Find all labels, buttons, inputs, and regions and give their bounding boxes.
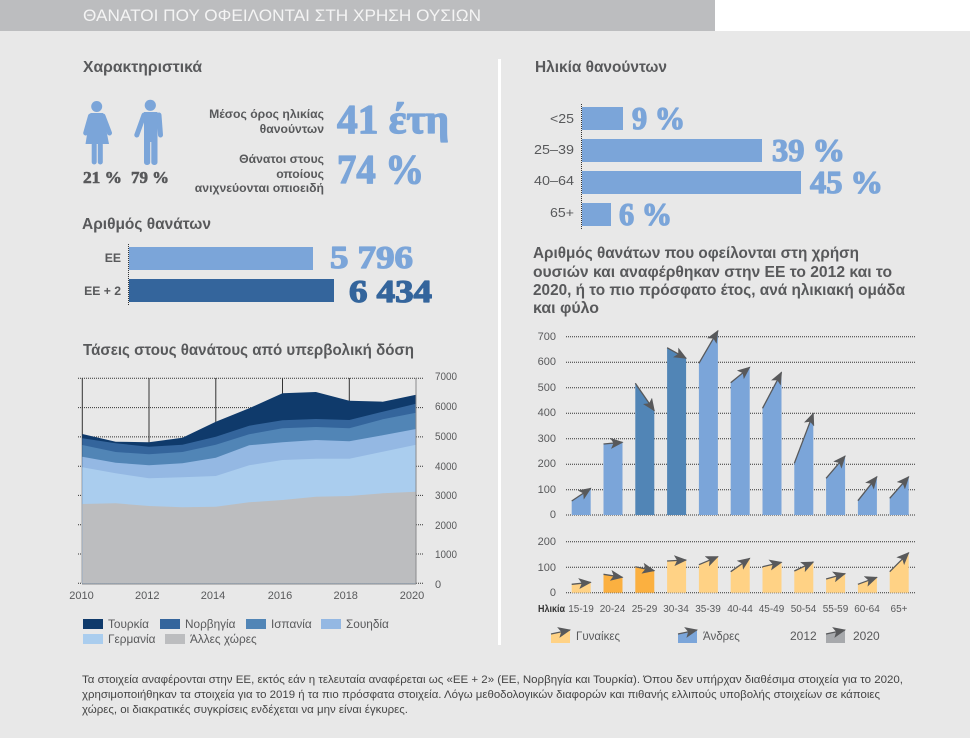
bar: under 25: 9 %: [632, 100, 685, 136]
bar: EU: 5 796: [330, 239, 413, 275]
chart: women: 0: [550, 587, 556, 599]
age group labels: 15-19: [568, 604, 594, 615]
chart: women: [538, 536, 915, 599]
heading: deaths by age and sex: 2020, ή το πιο πρόσφατο έτος, ανά ηλικιακή ομάδα: [533, 282, 905, 299]
age group labels: 35-39: [695, 604, 721, 615]
bar: 40-64: 40–64: [534, 174, 574, 188]
y axis labels: 0: [435, 579, 441, 591]
title banner: [0, 0, 715, 31]
y axis labels: 1000: [435, 549, 457, 561]
footnote: Τα στοιχεία αναφέρονται στην ΕΕ, εκτός εάν η τελευταία αναφέρεται ως «ΕΕ + 2» (ΕΕ, Νορβηγία και Τουρκία). Όπου δεν υπήρχαν διαθέσιμα στοιχεία για το 2020,: [82, 674, 903, 686]
age group labels: 55-59: [823, 604, 849, 615]
bar: under 25: <25: [550, 112, 574, 126]
panel: overdose trends: [69, 342, 457, 646]
chart: men: 400: [538, 407, 556, 419]
age group labels: [538, 604, 908, 615]
legend: area chart: Σουηδία: [346, 617, 389, 631]
bar: 25-39: [534, 132, 845, 168]
x axis labels: 2020: [400, 590, 424, 602]
chart: men: 600: [538, 356, 556, 368]
age group labels: Ηλικία: [538, 604, 566, 615]
panel: age of deceased: [534, 59, 883, 232]
legend: men: [678, 630, 740, 643]
y axis labels: 4000: [435, 461, 457, 473]
y axis labels: 5000: [435, 431, 457, 443]
legend: years: 2012: [790, 629, 817, 643]
legend: area chart: [83, 617, 389, 646]
panel: deaths by age and sex: [533, 245, 915, 643]
heading: deaths by age and sex: ουσιών και αναφέρθηκαν στην ΕΕ το 2012 και το: [533, 264, 892, 281]
icon: woman: [86, 101, 110, 164]
chart: men: 200: [538, 458, 556, 470]
share women: 21 %: [83, 168, 122, 187]
y axis labels: 2000: [435, 520, 457, 532]
heading: overdose trends: Τάσεις στους θανάτους από υπερβολική δόση: [83, 342, 414, 359]
legend: area chart: Ισπανία: [271, 617, 312, 631]
series: Germany: [82, 445, 416, 583]
label: opioids: οποίους: [276, 167, 324, 181]
panel: characteristics: [83, 59, 449, 195]
area chart: [69, 371, 457, 602]
heading: age of deceased: Ηλικία θανούντων: [535, 59, 667, 76]
legend: women: Γυναίκες: [576, 631, 620, 643]
panel: number of deaths: [82, 216, 432, 309]
label: mean age: Μέσος όρος ηλικίας: [209, 107, 324, 121]
x axis labels: 2016: [268, 590, 292, 602]
series: Norway: [82, 404, 416, 583]
legend: years: 2020: [853, 629, 880, 643]
heading: deaths by age and sex: Αριθμός θανάτων που οφείλονται στη χρήση: [533, 245, 859, 262]
value: mean age: 41 έτη: [337, 96, 449, 142]
bar: 25-39: 39 %: [772, 132, 845, 168]
legend: years: [790, 629, 880, 643]
age group labels: 45-49: [759, 604, 785, 615]
chart: men: [538, 331, 915, 521]
bar: 65+: 65+: [550, 206, 574, 220]
chart: men: 100: [538, 484, 556, 496]
bar: 65+: [550, 196, 672, 232]
age group labels: 25-29: [632, 604, 658, 615]
y axis labels: 7000: [435, 371, 457, 383]
footnote: χρησιμοποιήθηκαν τα στοιχεία για το 2019 ή τα πιο πρόσφατα στοιχεία. Λόγω μεθοδολογικών διαφορών και πιθανής ελλιπούς υποβολής στοιχείων σε κάποιες: [82, 689, 880, 701]
series: Turkey: [82, 392, 416, 583]
value: opioids: 74 %: [337, 146, 424, 192]
legend: men: Άνδρες: [703, 631, 740, 643]
bar: 40-64: [534, 164, 883, 200]
footnote: χώρες, οι διακρατικές συγκρίσεις ενδέχεται να μην είναι έγκυρες.: [82, 704, 408, 716]
bar: EU + 2: [84, 273, 432, 309]
label: mean age: θανούντων: [260, 122, 324, 136]
heading: characteristics: Χαρακτηριστικά: [83, 59, 202, 76]
bar: EU: [105, 239, 413, 275]
chart: men: 0: [550, 509, 556, 521]
x axis labels: [69, 590, 424, 602]
title banner: ΘΑΝΑΤΟΙ ΠΟΥ ΟΦΕΙΛΟΝΤΑΙ ΣΤΗ ΧΡΗΣΗ ΟΥΣΙΩΝ: [83, 7, 481, 25]
y axis labels: 6000: [435, 401, 457, 413]
icon: man: [137, 100, 160, 165]
bar: 65+: 6 %: [619, 196, 672, 232]
bar: EU + 2: 6 434: [349, 273, 432, 309]
chart: women: 200: [538, 536, 556, 548]
legend: bars: [551, 629, 880, 643]
series: Sweden: [82, 429, 416, 583]
x axis labels: 2012: [135, 590, 160, 602]
chart: men: 500: [538, 382, 556, 394]
legend: women: [551, 630, 620, 643]
x axis labels: 2018: [333, 590, 358, 602]
bar: under 25: [550, 100, 685, 136]
age group labels: 65+: [891, 604, 908, 615]
x axis labels: 2010: [69, 590, 94, 602]
legend: area chart: Άλλες χώρες: [190, 632, 257, 646]
age group labels: 40-44: [727, 604, 753, 615]
y axis labels: [435, 371, 457, 591]
bar: EU: ΕΕ: [105, 251, 121, 265]
series: other countries: [82, 492, 416, 583]
age group labels: 60-64: [854, 604, 880, 615]
series: Spain: [82, 413, 416, 583]
heading: deaths by age and sex: [533, 245, 905, 317]
legend: area chart: Νορβηγία: [185, 617, 236, 631]
legend: area chart: Γερμανία: [108, 632, 156, 646]
footnote: [82, 674, 903, 716]
label: opioids: ανιχνεύονται οπιοειδή: [195, 181, 324, 195]
bar: 25-39: 25–39: [534, 143, 574, 157]
y axis labels: 3000: [435, 490, 457, 502]
label: opioids: [195, 152, 324, 195]
age group labels: 30-34: [663, 604, 689, 615]
share men: 79 %: [131, 168, 169, 187]
chart: women: 100: [538, 562, 556, 574]
chart: men: 700: [538, 331, 556, 343]
legend: area chart: Τουρκία: [108, 617, 149, 631]
heading: number of deaths: Αριθμός θανάτων: [82, 216, 211, 233]
bar: 40-64: 45 %: [810, 164, 883, 200]
heading: deaths by age and sex: και φύλο: [533, 300, 599, 317]
x axis labels: 2014: [201, 590, 225, 602]
label: mean age: [209, 107, 324, 136]
chart: men: 300: [538, 433, 556, 445]
label: opioids: Θάνατοι στους: [239, 152, 324, 166]
age group labels: 50-54: [791, 604, 817, 615]
bar: EU + 2: ΕΕ + 2: [84, 284, 121, 298]
age group labels: 20-24: [600, 604, 626, 615]
